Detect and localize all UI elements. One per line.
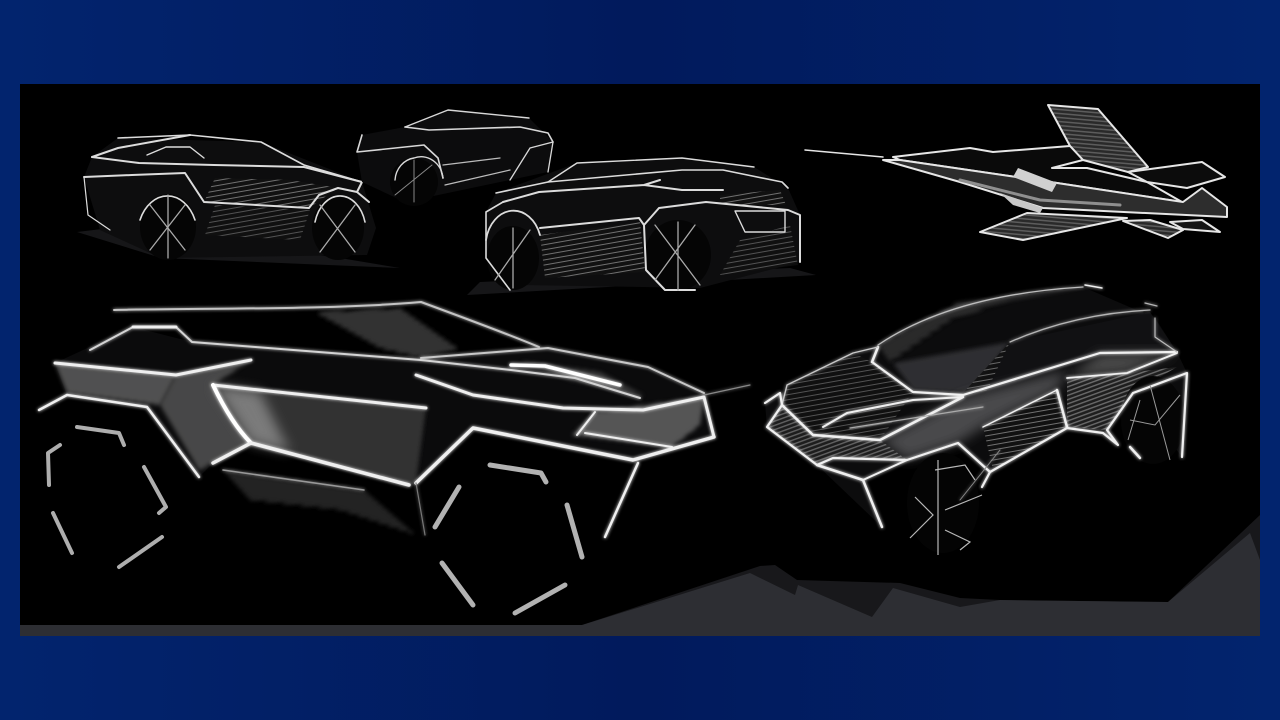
front lamp hatching [572, 397, 704, 447]
fuselage light panels [1013, 168, 1057, 192]
door panel hatching [213, 385, 426, 485]
roof hatching [878, 287, 1083, 362]
bumper hatching [767, 405, 907, 465]
sill hatching [223, 470, 416, 535]
ground shadow [77, 228, 400, 268]
black sketch panel [20, 84, 1260, 636]
lower stabilisers [1123, 220, 1183, 238]
hood shading [782, 353, 913, 440]
rear door hatching [160, 360, 251, 470]
mountain silhouette, dark layer [20, 515, 1260, 636]
body shading [55, 327, 714, 485]
fuselage [883, 160, 1227, 217]
wheels [907, 453, 979, 553]
wheels [140, 194, 196, 260]
wheels [487, 226, 539, 290]
front wheel spokes [910, 460, 982, 555]
door hatching [983, 390, 1067, 470]
mountain silhouette, light layer [20, 533, 1260, 636]
rear roof shading [985, 312, 1177, 395]
large SUV, front left [39, 302, 750, 613]
nose probe [805, 150, 883, 157]
rear wheel rim marks [48, 427, 166, 567]
ground shadow [467, 268, 816, 295]
lower wing [980, 213, 1127, 240]
tail fin [1048, 105, 1148, 172]
SUV, right [765, 285, 1187, 555]
small SUV, centre [467, 158, 816, 295]
side glow [880, 370, 1067, 460]
rear quarter hatching [55, 363, 176, 405]
windscreen highlight [315, 308, 460, 358]
body [84, 138, 376, 258]
body shading [765, 287, 1187, 527]
body [486, 158, 800, 288]
windscreen shading [893, 342, 1010, 393]
bright body lines [39, 302, 750, 537]
rear wheel spokes [1128, 385, 1180, 460]
small SUV, left [77, 135, 400, 268]
body [357, 110, 553, 202]
body lines [765, 285, 1187, 527]
fighter jet sketch [805, 105, 1227, 240]
upper wing [893, 146, 1182, 202]
small SUV, centre top [357, 110, 553, 206]
stabiliser [1128, 162, 1225, 188]
rear quarter hatching [1067, 367, 1177, 430]
front wheel rim marks [435, 465, 582, 613]
hatching [204, 178, 338, 208]
hatching [540, 222, 645, 278]
